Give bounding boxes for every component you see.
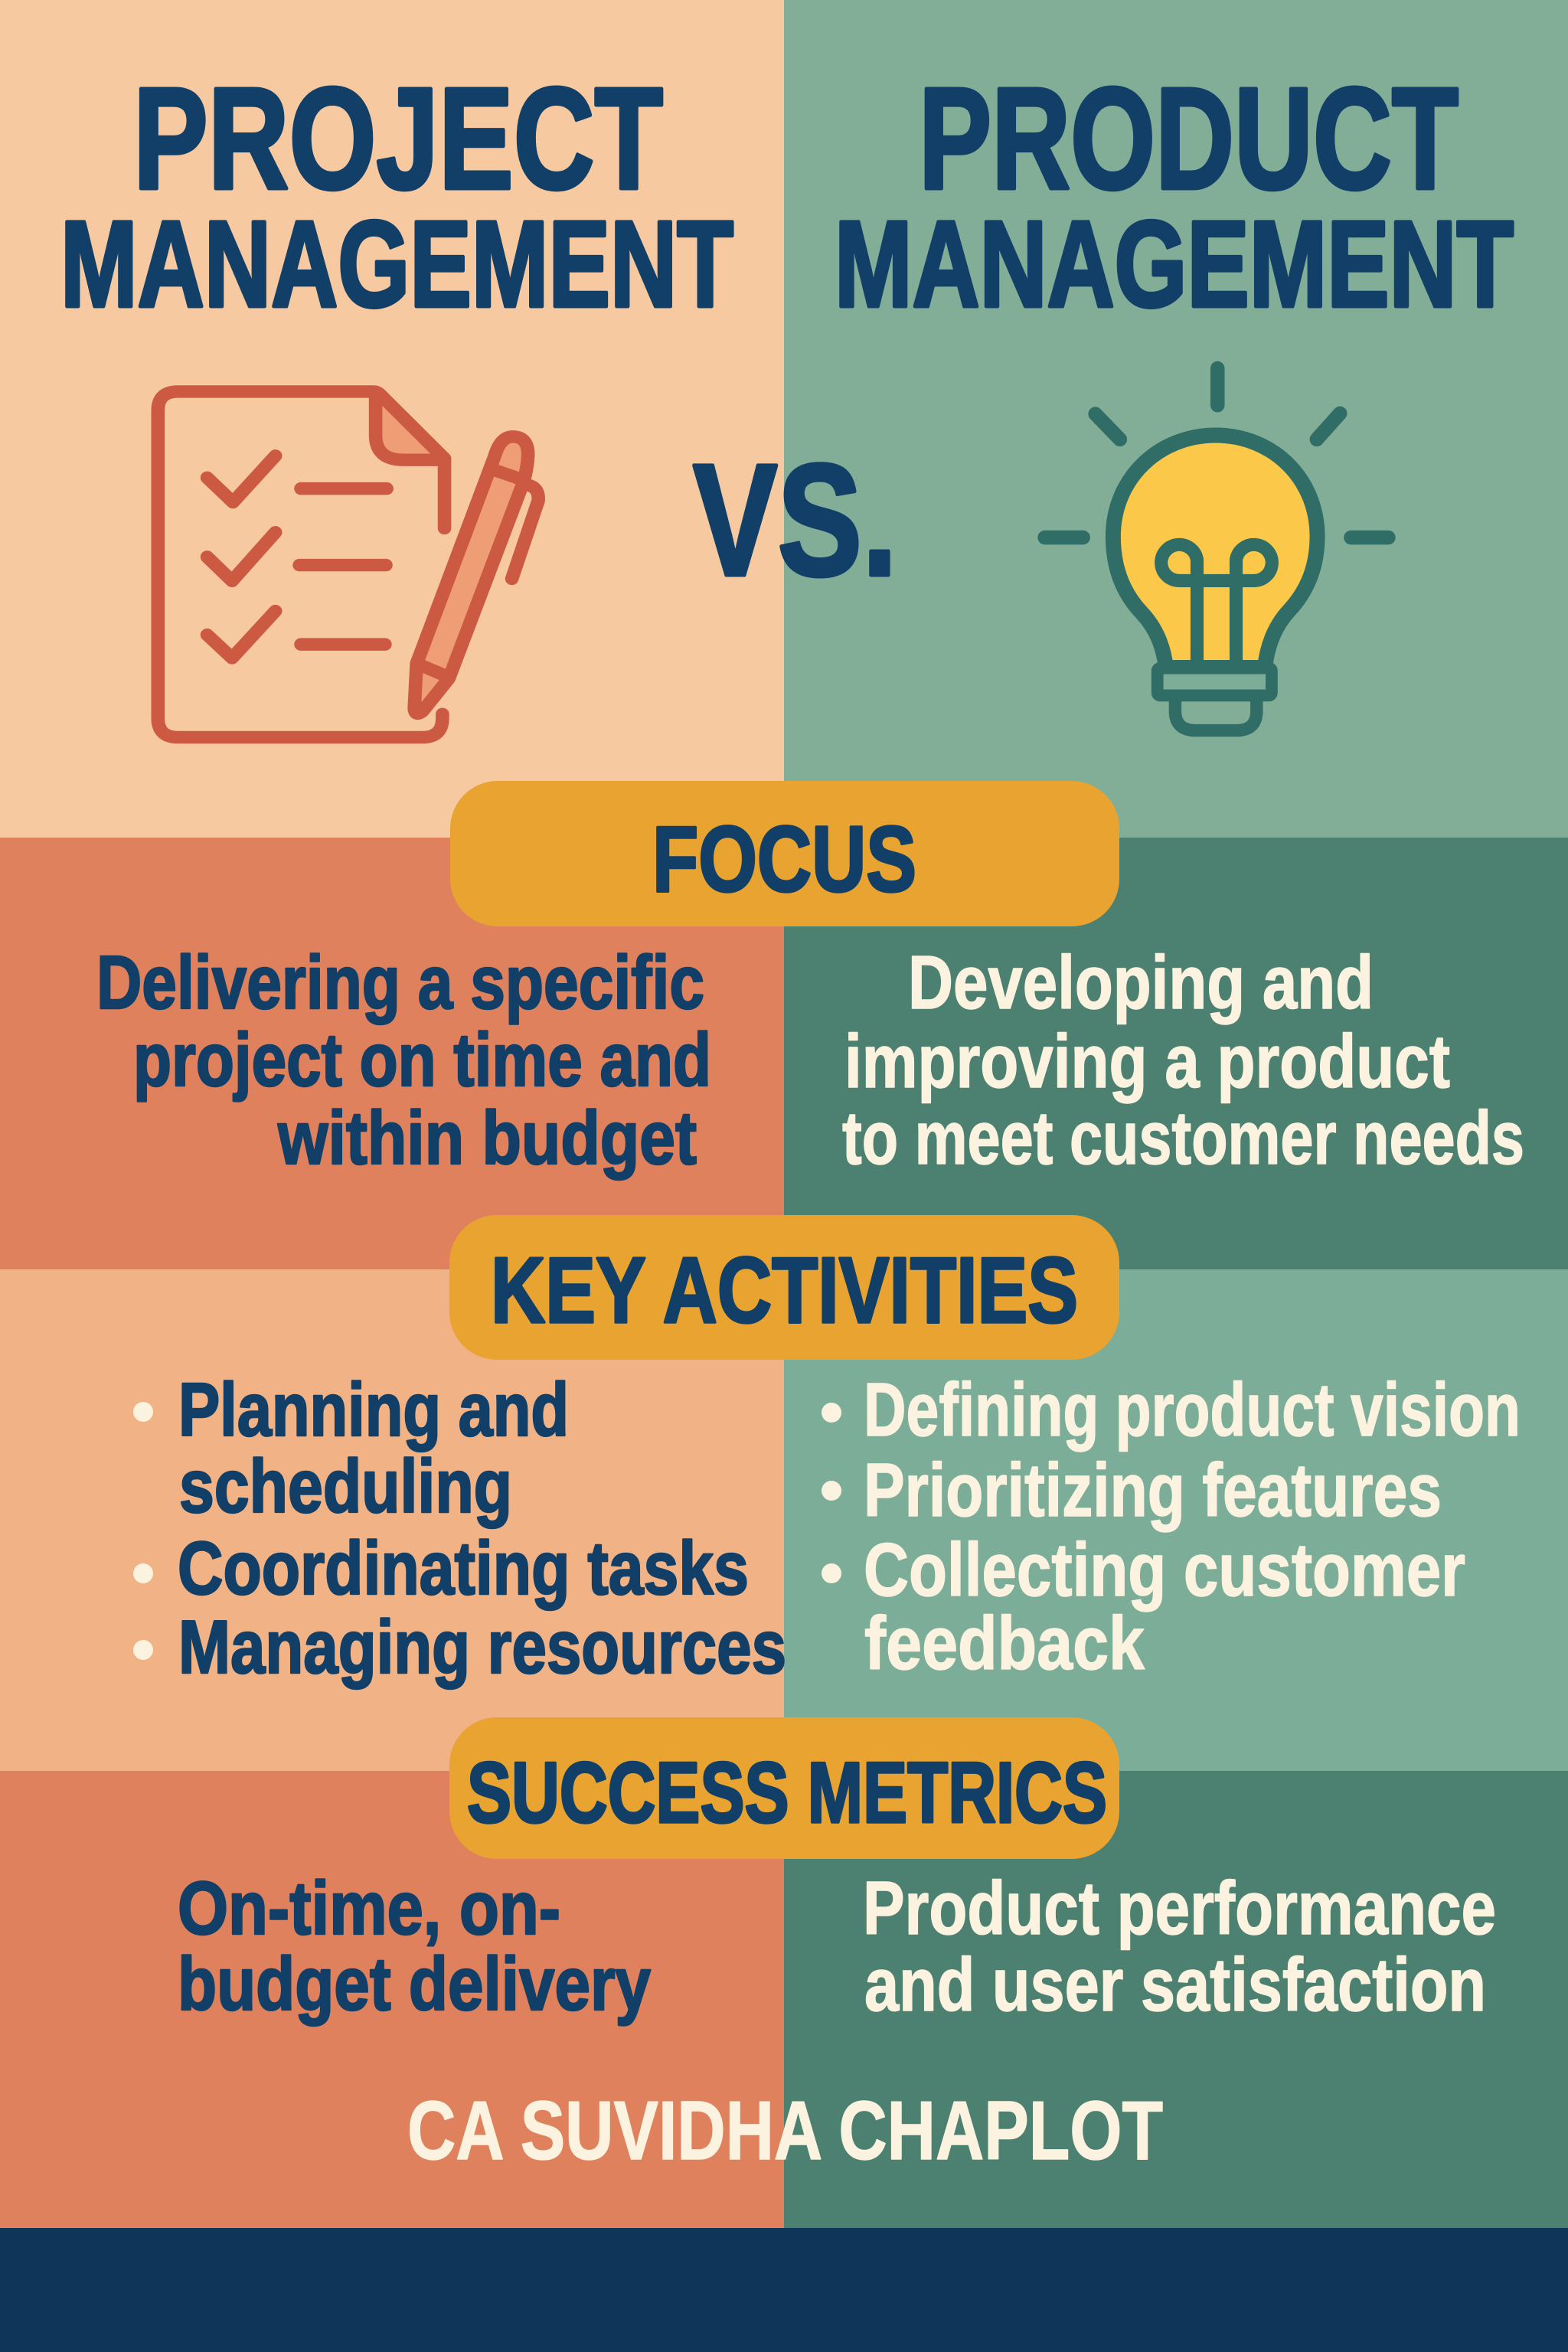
text: project focus: project on time and	[133, 1018, 711, 1102]
heading pill: focus: FOCUS	[652, 807, 916, 911]
vs label: VS.	[693, 432, 897, 609]
title: product management	[835, 58, 1514, 332]
text: project focus: within budget	[277, 1096, 697, 1180]
list: project key activities: Coordinating tasks	[178, 1526, 749, 1610]
list: project key activities: scheduling	[179, 1444, 512, 1528]
text: product focus	[842, 940, 1524, 1180]
list: project key activities: Managing resources	[178, 1605, 786, 1689]
panel: project key activities background	[0, 1269, 784, 1771]
author credit: CA SUVIDHA CHAPLOT	[407, 2084, 1163, 2177]
text: product focus: Developing and	[908, 940, 1374, 1024]
panel: product key activities background	[784, 1269, 1568, 1771]
title: project management	[60, 58, 733, 332]
panel: product success metrics background	[784, 1771, 1568, 2228]
bullets	[822, 1403, 841, 1583]
panel: product header background	[784, 0, 1568, 838]
text: project success metrics: On-time, on-	[178, 1866, 560, 1950]
heading pill: key activities: KEY ACTIVITIES	[491, 1238, 1078, 1342]
bullets	[133, 1402, 153, 1660]
heading pill: key activities	[449, 1215, 1119, 1360]
heading pill: success metrics	[449, 1717, 1119, 1859]
text: project success metrics	[178, 1866, 651, 2026]
heading pill: success metrics: SUCCESS METRICS	[467, 1745, 1107, 1841]
text: project success metrics: budget delivery	[178, 1942, 651, 2026]
title: project management: PROJECT	[133, 58, 663, 220]
footer band	[0, 2228, 1568, 2352]
heading pill: focus	[450, 781, 1119, 926]
list: project key activities	[133, 1367, 786, 1689]
list: product key activities	[822, 1367, 1521, 1685]
icon: checklist document with pen	[158, 391, 538, 737]
list: product key activities: Prioritizing features	[864, 1448, 1442, 1532]
title: project management: MANAGEMENT	[60, 195, 733, 332]
panel: product focus background	[784, 838, 1568, 1269]
list: project key activities: Planning and	[178, 1367, 569, 1452]
text: project focus	[96, 940, 711, 1180]
list: product key activities: Collecting customer	[864, 1527, 1465, 1612]
icon: light bulb	[1045, 368, 1388, 730]
text: product focus: improving a product	[844, 1019, 1450, 1103]
panel: project success metrics background	[0, 1771, 784, 2228]
text: project focus: Delivering a specific	[96, 940, 704, 1024]
list: product key activities: feedback	[864, 1601, 1145, 1685]
panel: project header background	[0, 0, 784, 838]
panel: project focus background	[0, 838, 784, 1269]
text: product success metrics	[863, 1866, 1496, 2027]
